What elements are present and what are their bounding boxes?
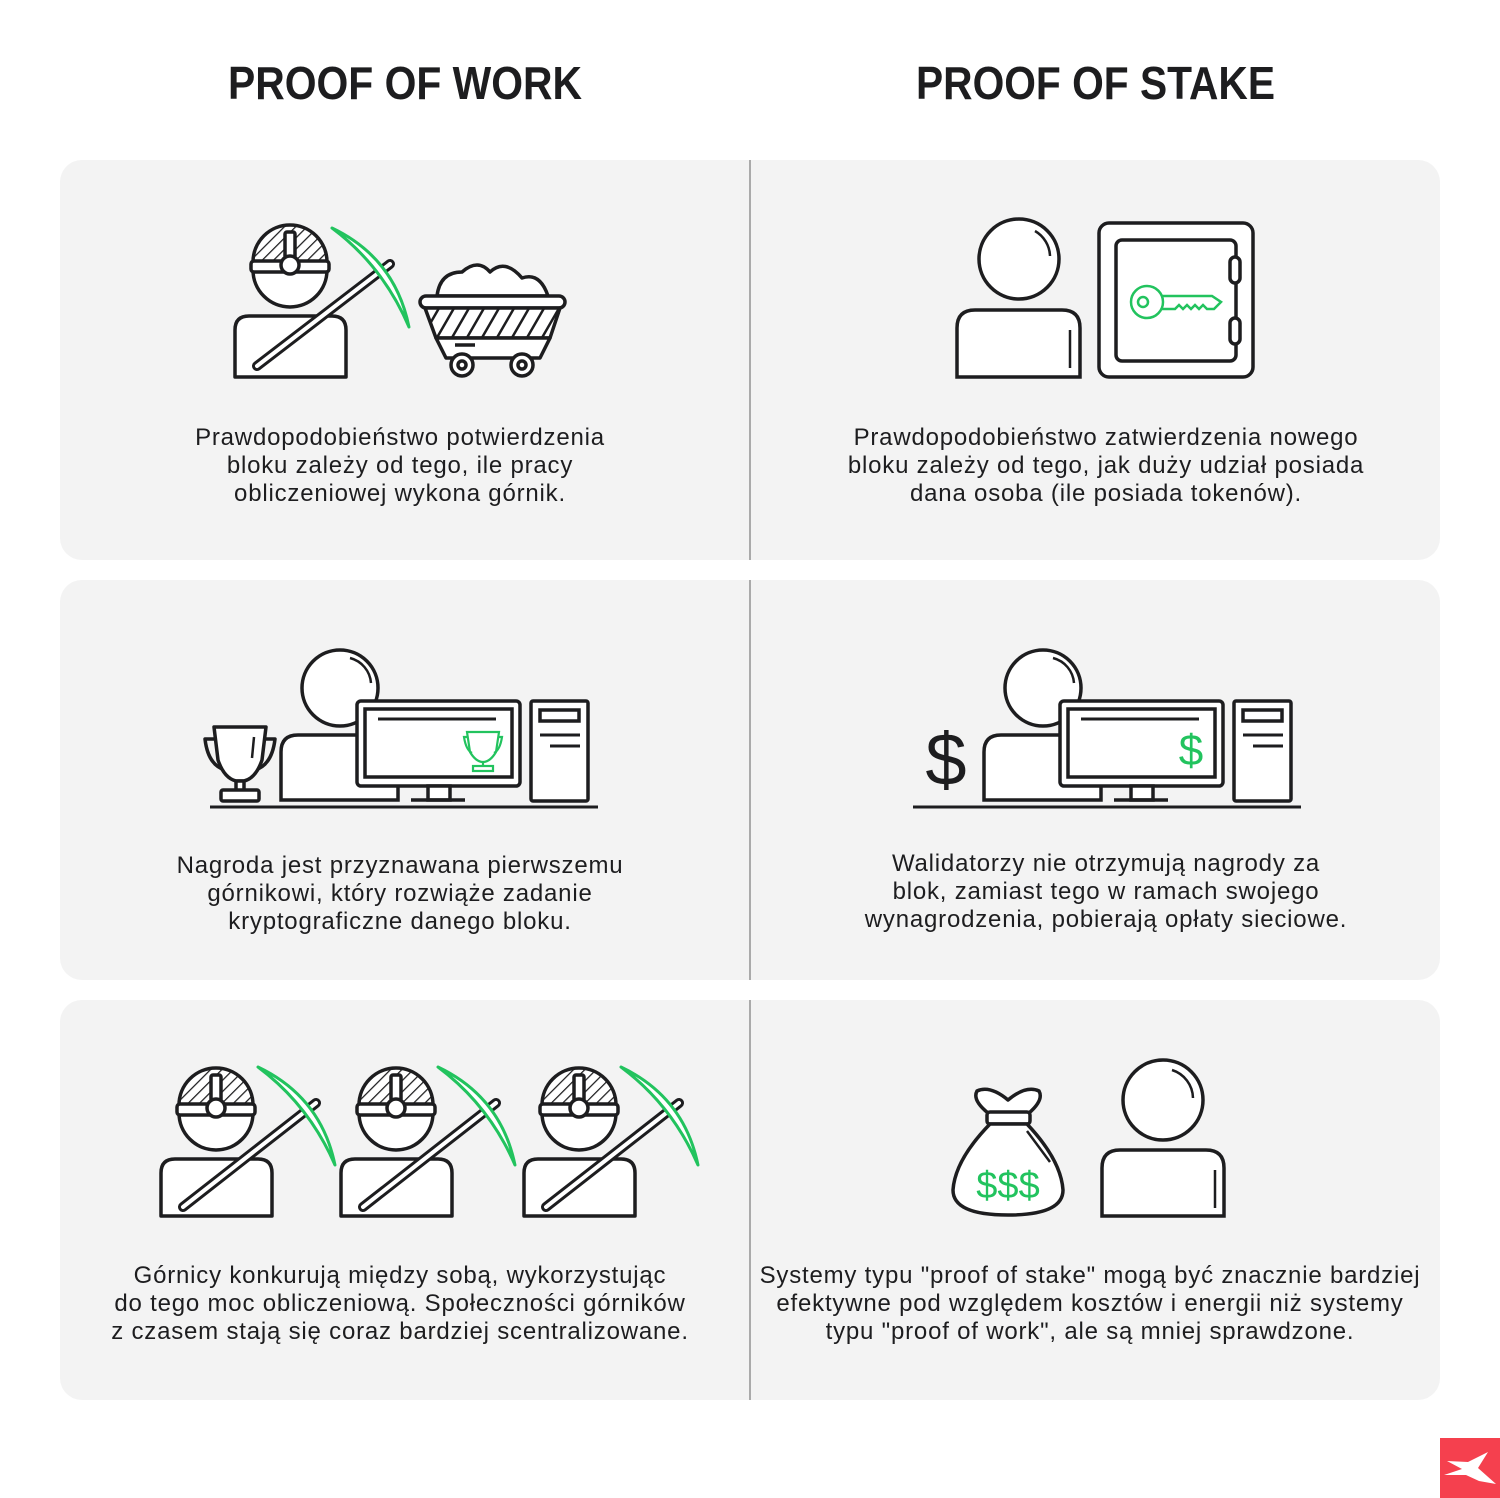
text: pos 1: Prawdopodobieństwo zatwierdzenia nowego [854,424,1358,451]
text: pos 3: Systemy typu "proof of stake" mogą być znacznie bardziej [760,1262,1420,1289]
panel: row 1 [60,160,1440,560]
text: pos 2: Walidatorzy nie otrzymują nagrody za [892,850,1320,877]
icon: money bag: $$$ [976,1165,1040,1207]
panel: row 3 [60,1000,1440,1400]
title: proof of work: PROOF OF WORK [228,57,582,109]
icon: person at computer (pos) [913,650,1301,807]
text: pos 2: blok, zamiast tego w ramach swojego [893,878,1319,905]
text: pow 1: bloku zależy od tego, ile pracy [227,452,573,479]
text: pow 3: z czasem stają się coraz bardziej scentralizowane. [111,1318,689,1345]
text: pow 2: górnikowi, który rozwiąże zadanie [207,880,593,907]
icon: person at computer (pos): $ [1179,726,1203,775]
text: pos 1: bloku zależy od tego, jak duży udział posiada [848,452,1364,479]
text: pos 3: efektywne pod względem kosztów i energii niż systemy [776,1290,1404,1317]
icon: person (row 3) [1102,1060,1224,1216]
icon: person at computer (pow) [210,650,598,807]
panel: row 2 [60,580,1440,980]
text: pow 3: do tego moc obliczeniową. Społeczności górników [114,1290,686,1317]
text: pow 2: Nagroda jest przyznawana pierwszemu [177,852,623,879]
text: pos 1: dana osoba (ile posiada tokenów). [910,480,1302,507]
icon: mine cart [420,265,565,376]
text: pow 2: kryptograficzne danego bloku. [228,908,572,935]
logo [1440,1438,1500,1498]
text: pow 3: Górnicy konkurują między sobą, wykorzystując [134,1262,666,1289]
icon: dollar sign: $ [925,718,967,801]
icon: trophy [205,727,275,801]
text: pos 3: typu "proof of work", ale są mniej sprawdzone. [826,1318,1354,1345]
text: pow 1: Prawdopodobieństwo potwierdzenia [195,424,605,451]
icon: person [957,219,1080,377]
icon: miner with pickaxe [235,225,409,377]
title: proof of stake: PROOF OF STAKE [916,57,1275,109]
text: pos 2: wynagrodzenia, pobierają opłaty sieciowe. [864,906,1347,933]
icon: three miners [161,1067,698,1216]
icon: money bag [953,1089,1063,1215]
icon: safe with key [1099,223,1253,377]
text: pow 1: obliczeniowej wykona górnik. [234,480,566,507]
